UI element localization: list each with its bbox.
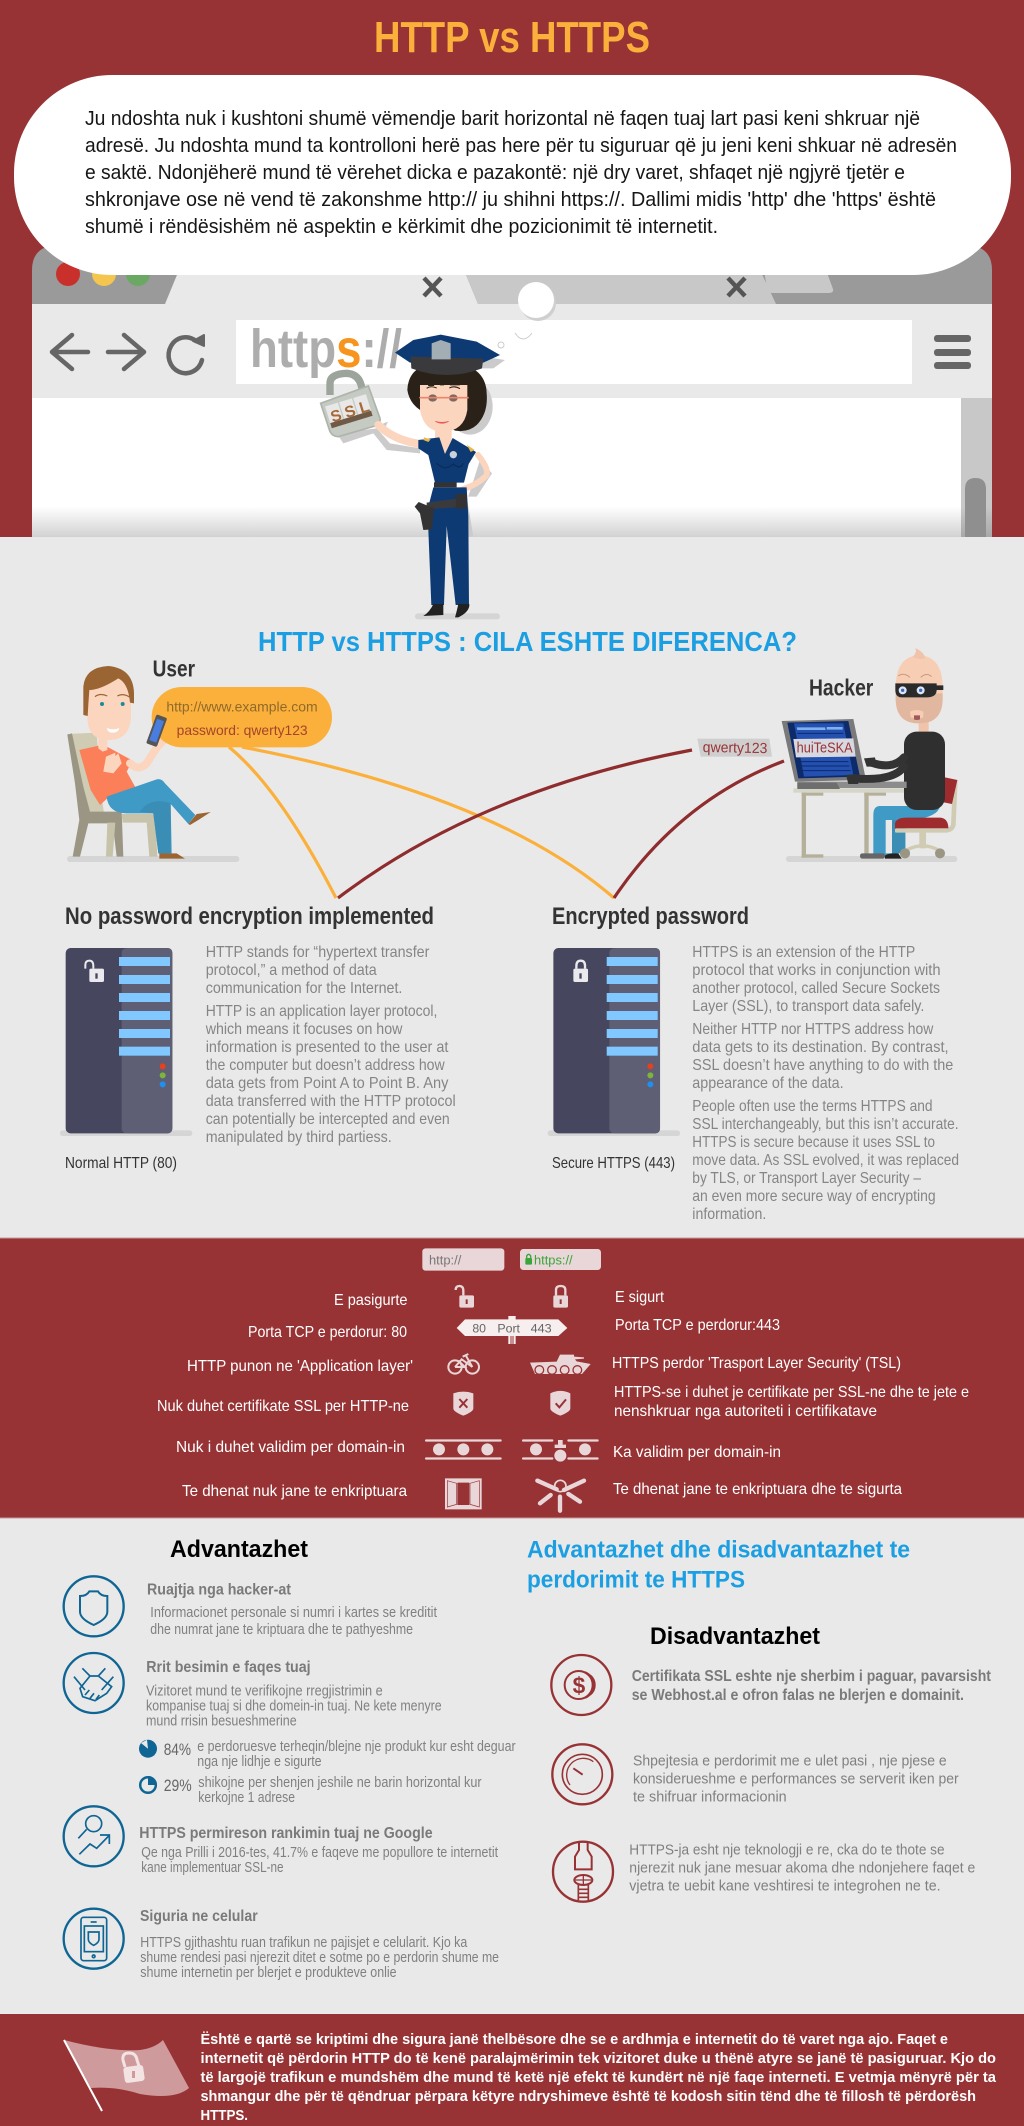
disadvantage: certificate cost — [632, 1668, 992, 1704]
advantage icons — [64, 1576, 124, 1969]
advantage: mobile security: shume internetin per blerjet e produkteve onlie — [140, 1965, 397, 1981]
row labels: HTTP: Nuk duhet certifikate SSL per HTTP-ne — [157, 1398, 409, 1415]
description text: information. — [692, 1206, 766, 1223]
icon: mobile phone — [64, 1909, 124, 1969]
description text: SSL doesn’t have anything to do with the — [692, 1057, 953, 1074]
browser tabs — [165, 270, 833, 304]
stat: 29 percent: shikojne per shenjen jeshile ne barin horizontal kur — [198, 1775, 482, 1791]
advantage: trust: Rrit besimin e faqes tuaj — [146, 1659, 311, 1676]
url boxes — [422, 1248, 601, 1271]
advantage: mobile security — [140, 1908, 499, 1981]
qwerty label: qwerty123 — [703, 740, 768, 757]
description text: manipulated by third partiess. — [206, 1129, 392, 1146]
icon: coin — [551, 1655, 611, 1715]
chair — [67, 733, 157, 857]
disadvantage: new technology: njerezit nuk jane mesuar akoma dhe ndonjehere faqet e — [629, 1861, 975, 1877]
panel: conclusion band — [0, 2014, 1024, 2126]
advantage: protection — [147, 1582, 437, 1638]
row labels: HTTPS: E sigurt — [615, 1289, 664, 1306]
description text: HTTPS is an extension of the HTTP — [692, 944, 915, 961]
icon: open door — [445, 1478, 482, 1509]
scrollbar — [961, 398, 992, 537]
description text: communication for the Internet. — [206, 980, 402, 997]
advantage: protection: Informacionet personale si numri i kartes se kreditit — [150, 1605, 437, 1621]
row labels: HTTP: E pasigurte — [334, 1292, 408, 1309]
stat: 84 percent — [139, 1739, 516, 1770]
icon: shield — [64, 1576, 124, 1636]
SSL tiles: S — [343, 403, 358, 422]
description text: SSL interchangeably, but this isn’t accurate. — [692, 1116, 959, 1133]
disadvantage: speed: konsiderueshme e performances se serverit iken per — [633, 1772, 959, 1788]
advantage: trust: mund rrisin besueshmerine — [146, 1714, 297, 1730]
icon: coin: $ — [573, 1672, 586, 1698]
description text: another protocol, called Secure Sockets — [692, 980, 940, 997]
row labels: HTTPS: HTTPS-se i duhet je certifikate per SSL-ne dhe te jete e — [614, 1384, 969, 1401]
description text: data gets from Point A to Point B. Any — [206, 1075, 448, 1092]
description text: the computer but doesn’t address how — [206, 1057, 445, 1074]
title: HTTP vs HTTPS — [374, 13, 650, 62]
advantage: google ranking: Qe nga Prilli i 2016-tes, 41.7% e faqeve me popullore te internetit — [141, 1845, 498, 1861]
description text: an even more secure way of encrypting — [692, 1188, 936, 1205]
description text: HTTP stands for “hypertext transfer — [206, 944, 430, 961]
heading: no password encryption: No password encryption implemented — [65, 903, 434, 930]
icon: search and growth — [64, 1806, 124, 1866]
row labels: HTTPS: Ka validim per domain-in — [613, 1444, 781, 1461]
heading: advantages and disadvantages: perdorimit te HTTPS — [527, 1567, 745, 1594]
advantage: trust: Vizitoret mund te verifikojne rregjistrimin e — [146, 1684, 383, 1700]
advantage: mobile security: shume rendesi pasi njerezit ditet e sotme po e perdorin shume me — [140, 1950, 499, 1966]
panel: HTTP without encryption — [60, 903, 456, 1172]
stat: 84 percent: 84% — [164, 1740, 191, 1759]
intro text: e saktë. Ndonjëherë mund të vërehet dicka e pazakontë: një dry varet, shfaqet një ngjyrë tjetër e — [85, 162, 905, 184]
description text: data gets to its destination. By contrast, — [692, 1039, 949, 1056]
stat: 84 percent: e perdoruesve terheqin/blejne nje produkt kur esht deguar — [197, 1739, 516, 1755]
intro text: shkronjave ose në vend të zakonshme http:// ju shihni https://. Dallimi midis 'http' dhe 'https' është — [85, 189, 936, 211]
disadvantage: speed: te shifruar informacionin — [633, 1790, 787, 1806]
advantage: mobile security: HTTPS gjithashtu ruan trafikun ne pajisjet e celularit. Kjo ka — [140, 1935, 468, 1951]
row labels: HTTP: Porta TCP e perdorur: 80 — [248, 1324, 407, 1341]
icon: port signpost — [457, 1316, 567, 1344]
description text: Layer (SSL), to transport data safely. — [692, 998, 924, 1015]
description text: protocol,” a method of data — [206, 962, 377, 979]
disadvantage icons — [551, 1655, 613, 1902]
row labels: HTTPS: HTTPS perdor 'Trasport Layer Security' (TSL) — [612, 1355, 901, 1372]
icon: port signpost: 443 — [531, 1322, 552, 1336]
description text: information is presented to the user at — [206, 1039, 449, 1056]
description text: Neither HTTP nor HTTPS address how — [692, 1021, 934, 1038]
description text: appearance of the data. — [692, 1075, 844, 1092]
icon: armored vehicle — [530, 1355, 591, 1374]
disadvantage: new technology: HTTPS-ja esht nje teknologji e re, cka do te thote se — [629, 1843, 945, 1859]
desk — [793, 788, 907, 858]
advantage: protection: Ruajtja nga hacker-at — [147, 1582, 292, 1599]
conclusion text: të largojë trafikun e mundshëm dhe mund të ketë një efekt të kundërt në një faqe interneti. E vetmja mënyrë për ta — [200, 2069, 997, 2086]
row labels: HTTP: Te dhenat nuk jane te enkriptuara — [182, 1483, 407, 1500]
heading: disadvantages: Disadvantazhet — [650, 1623, 820, 1650]
hacker label: Hacker — [809, 674, 873, 700]
panel: comparison band — [0, 1238, 1024, 1518]
icon: flag with lock — [64, 2040, 189, 2111]
icons: shields — [453, 1391, 570, 1416]
icon: bicycle — [448, 1354, 479, 1374]
conclusion text: shmangur dhe për të qëndruar përpara këtyre ndryshimeve është të kodosh sitin tënd dhe të fillosh të përdorësh — [200, 2088, 976, 2105]
conclusion text: HTTPS. — [200, 2107, 248, 2124]
address bar — [236, 320, 912, 384]
icon: port signpost: Port — [497, 1322, 521, 1336]
heading: advantages: Advantazhet — [170, 1536, 308, 1563]
advantage: mobile security: Siguria ne celular — [140, 1908, 258, 1925]
comparison icons — [422, 1248, 601, 1511]
intro text: Ju ndoshta nuk i kushtoni shumë vëmendje barit horizontal në faqen tuaj lart pasi keni shkruar një — [85, 108, 920, 130]
url and password bubble: password: qwerty123 — [177, 722, 308, 738]
panel: HTTPS with encryption — [548, 903, 959, 1223]
row labels: HTTP: HTTP punon ne 'Application layer' — [187, 1358, 413, 1375]
row labels: HTTPS — [612, 1289, 969, 1498]
conclusion text: Është e qartë se kriptimi dhe sigura janë thelbësore dhe se e ardhmja e internetit do të varet nga ajo. Faqet e — [200, 2031, 948, 2048]
phone — [146, 714, 167, 747]
laptop — [782, 719, 907, 789]
description text — [692, 944, 959, 1223]
row labels: HTTP — [157, 1292, 413, 1500]
SSL tiles: S — [329, 407, 344, 426]
icon: speed gauge — [552, 1744, 612, 1804]
icon: screw — [553, 1842, 613, 1902]
heading: advantages and disadvantages — [527, 1537, 910, 1594]
description text: data transferred with the HTTP protocol — [206, 1093, 456, 1110]
icons: locks — [456, 1286, 568, 1308]
disadvantage: speed: Shpejtesia e perdorimit me e ulet pasi , nje pjese e — [633, 1754, 947, 1770]
advantage: trust: kompanise tuaj si dhe domein-in tuaj. Ne kete menyre — [146, 1699, 442, 1715]
intro text — [85, 108, 957, 238]
disadvantage: new technology: vjetra te uebit kane veshtiresi te integrohen ne te. — [629, 1879, 941, 1895]
panel: advantages — [64, 1536, 516, 1981]
illustration: user — [67, 656, 332, 862]
advantage: trust — [139, 1659, 516, 1806]
traffic light buttons — [56, 262, 150, 286]
section heading: HTTP vs HTTPS : CILA ESHTE DIFERENCA? — [258, 626, 797, 657]
icon: locked server — [548, 948, 680, 1136]
server caption: Secure HTTPS (443) — [552, 1155, 675, 1172]
disadvantage: speed — [633, 1754, 959, 1806]
user label: User — [153, 656, 195, 682]
description text: which means it focuses on how — [205, 1021, 403, 1038]
advantage: google ranking: kane implementuar SSL-ne — [141, 1860, 284, 1876]
conclusion text: internetit që përdorin HTTP do të kenë paralajmërimin tek vizitoret duke u thënë atyre se janë të pasiguruar. Kjo do — [200, 2050, 996, 2067]
SSL tiles — [325, 394, 373, 428]
url boxes: http:// — [429, 1253, 462, 1268]
row labels: HTTPS: Te dhenat jane te enkriptuara dhe te sigurta — [613, 1481, 902, 1498]
icon: open server — [60, 948, 192, 1136]
description text: move data. As SSL evolved, it was replaced — [692, 1152, 959, 1169]
intro text: shumë i rëndësishëm në aspektin e kërkimit dhe pozicionimit të internetit. — [85, 216, 718, 238]
panel: disadvantages — [551, 1623, 992, 1902]
row labels: HTTPS: Porta TCP e perdorur:443 — [615, 1317, 780, 1334]
url boxes: https:// — [534, 1253, 573, 1268]
advantage: protection: dhe numrat jane te kriptuara dhe te pathyeshme — [150, 1622, 413, 1638]
advantage: google ranking: HTTPS permireson rankimin tuaj ne Google — [139, 1825, 433, 1842]
address text https: https:// — [250, 319, 402, 379]
illustration: hacker — [697, 648, 957, 862]
url and password bubble: http://www.example.com — [166, 699, 318, 715]
server caption: Normal HTTP (80) — [65, 1155, 177, 1172]
stat: 29 percent — [140, 1775, 482, 1806]
connection curves — [229, 747, 784, 898]
menu icon — [934, 335, 971, 369]
url and password bubble — [152, 687, 332, 747]
SSL tiles: L — [357, 398, 372, 417]
conclusion text — [200, 2031, 997, 2124]
icon: handshake — [64, 1653, 124, 1713]
garbled password label: huiTeSKA — [797, 741, 853, 757]
description text: can potentially be intercepted and even — [206, 1111, 450, 1128]
description text: protocol that works in conjunction with — [692, 962, 941, 979]
stat: 84 percent: nga nje lidhje e sigurte — [197, 1754, 322, 1770]
thought bubbles — [498, 282, 556, 348]
advantage: google ranking — [139, 1825, 498, 1876]
icon: port signpost: 80 — [472, 1322, 486, 1336]
description text: HTTPS is secure because it uses SSL to — [692, 1134, 935, 1151]
stat: 29 percent: kerkojne 1 adrese — [198, 1790, 295, 1806]
illustration: police officer with SSL lock — [321, 335, 505, 619]
heading: encrypted password: Encrypted password — [552, 903, 749, 930]
stat: 29 percent: 29% — [164, 1776, 192, 1795]
speech bubble — [14, 75, 1011, 275]
disadvantage: new technology — [629, 1843, 975, 1895]
heading: advantages and disadvantages: Advantazhet dhe disadvantazhet te — [527, 1537, 910, 1564]
icons: domain validation rollers — [425, 1439, 599, 1462]
intro text: adresë. Ju ndoshta mund ta kontrolloni herë pas here për tu siguruar që ju jeni keni shkuar në adresën — [85, 135, 957, 157]
navigation arrows — [52, 335, 204, 373]
description text: People often use the terms HTTPS and — [692, 1098, 933, 1115]
icon: keys — [537, 1480, 584, 1511]
description text — [205, 944, 456, 1146]
description text: by TLS, or Transport Layer Security – — [692, 1170, 921, 1187]
browser window illustration — [32, 245, 992, 537]
description text: HTTP is an application layer protocol, — [206, 1003, 437, 1020]
chair — [900, 777, 957, 858]
disadvantage: certificate cost: se Webhost.al e ofron falas ne blerjen e domainit. — [632, 1687, 964, 1704]
gray lower background — [0, 537, 1024, 1237]
row labels: HTTP: Nuk i duhet validim per domain-in — [176, 1439, 405, 1456]
row labels: HTTPS: nenshkruar nga autoriteti i certifikatave — [614, 1403, 877, 1420]
